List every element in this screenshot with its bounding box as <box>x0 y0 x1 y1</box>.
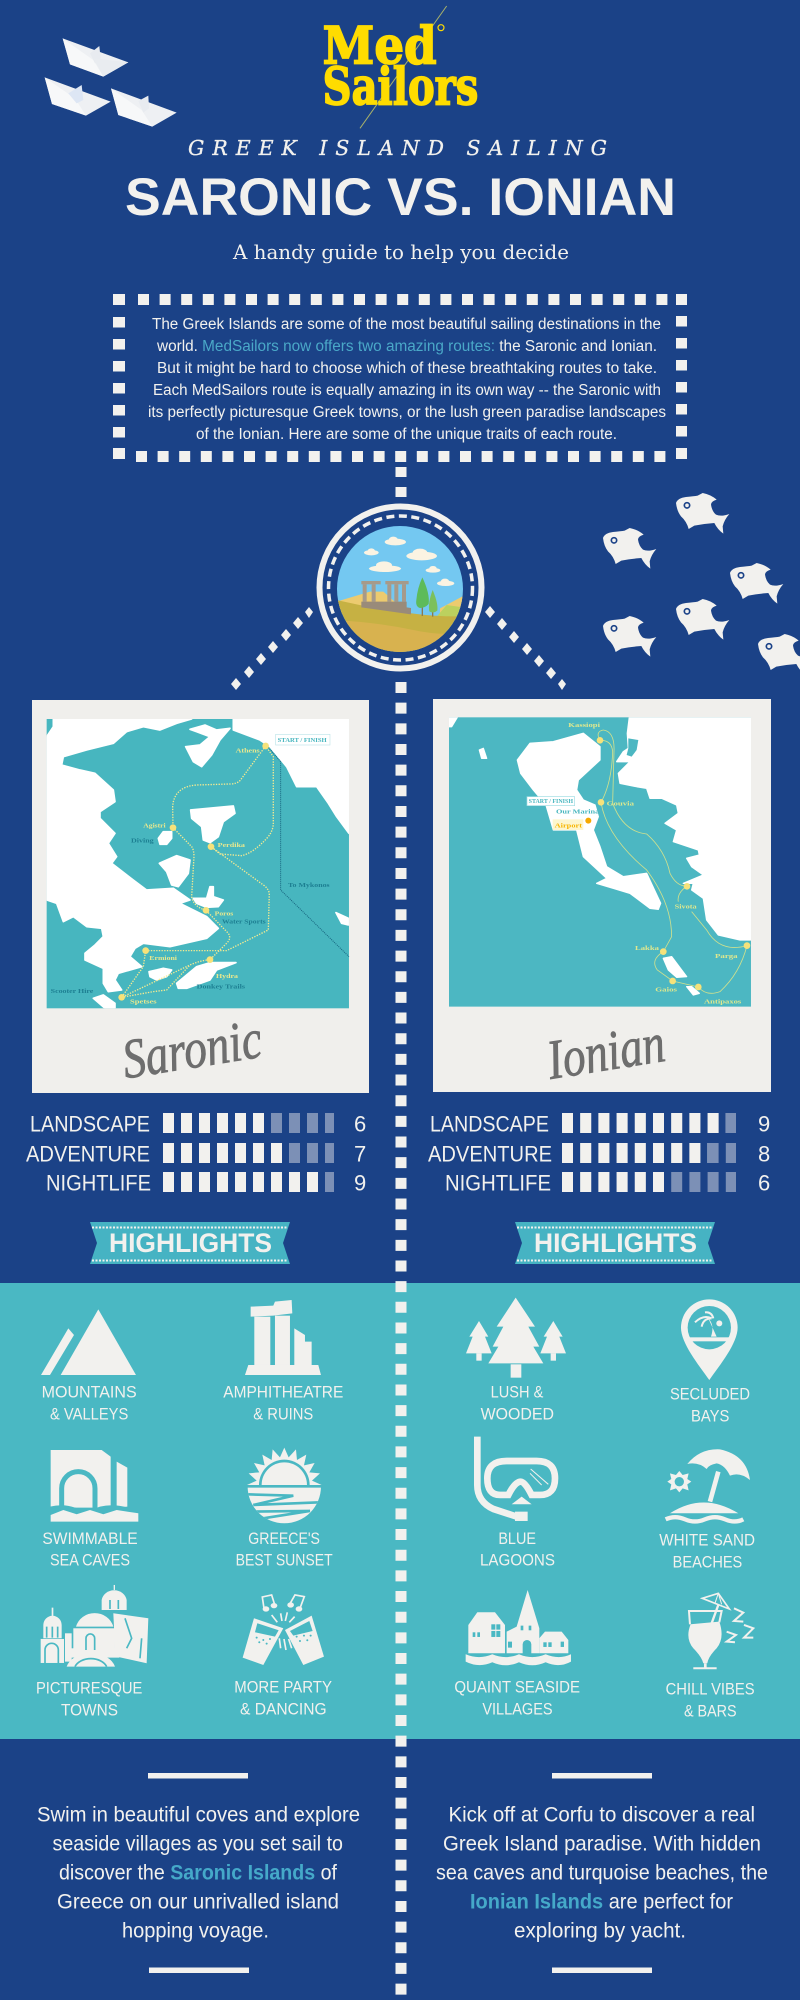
stats: Saronic: 6 <box>354 1112 366 1136</box>
map: Saronic route: Athens <box>236 748 260 755</box>
ribbon: highlights right: HIGHLIGHTS <box>534 1228 697 1258</box>
stats: Ionian: ADVENTURE <box>428 1142 552 1166</box>
labels: Saronic highlights: MORE PARTY <box>234 1677 332 1696</box>
labels: Ionian highlights: LAGOONS <box>480 1551 555 1570</box>
stats: Saronic: ADVENTURE <box>26 1142 150 1166</box>
stats: Saronic: LANDSCAPE <box>30 1112 150 1136</box>
stats: Saronic: NIGHTLIFE <box>46 1170 151 1196</box>
map: Saronic route: Donkey Trails <box>197 984 245 991</box>
closing text: Ionian: Ionian Islands are perfect for <box>470 1890 733 1914</box>
stats: Ionian: 6 <box>758 1170 770 1196</box>
icon: seaside village <box>466 1590 571 1665</box>
labels: Ionian highlights: WHITE SAND <box>659 1531 755 1550</box>
closing text: Saronic: hopping voyage. <box>122 1918 269 1942</box>
intro text <box>148 316 666 443</box>
labels: Saronic highlights: BEST SUNSET <box>236 1551 333 1570</box>
intro text: world. MedSailors now offers two amazing routes: the Saronic and Ionian. <box>156 338 657 355</box>
logo: MedSailors: Sailors <box>323 56 478 117</box>
icon: party glasses <box>243 1595 324 1665</box>
central dotted spine <box>396 467 406 1995</box>
logo: MedSailors <box>323 6 478 128</box>
map: Ionian route: Sivota <box>675 903 697 910</box>
map: Ionian route: Antipaxos <box>704 998 742 1005</box>
labels: Ionian highlights: CHILL VIBES <box>666 1679 755 1698</box>
icon: sea cave <box>50 1450 138 1522</box>
map: Ionian route: Gouvia <box>607 800 635 807</box>
map: Ionian route: Our Marina <box>556 809 600 816</box>
map: Ionian route: Airport <box>555 822 583 829</box>
map: Ionian route: Parga <box>715 953 739 960</box>
map: Ionian route: Gaios <box>655 987 678 994</box>
school of fish <box>603 493 800 675</box>
icon: location pin with palm <box>681 1299 738 1380</box>
labels: Saronic highlights: & DANCING <box>240 1699 327 1718</box>
map: Saronic route: Poros <box>215 911 234 918</box>
labels: Ionian highlights: SECLUDED <box>670 1385 750 1404</box>
map: Saronic route <box>47 719 349 1008</box>
labels: Saronic highlights: SEA CAVES <box>50 1551 130 1570</box>
labels: Saronic highlights: & RUINS <box>253 1404 313 1423</box>
icon: paper boats <box>45 38 177 127</box>
stats: Ionian <box>428 1112 770 1196</box>
map: Saronic route: Ermioni <box>149 955 177 962</box>
labels: Ionian highlights: VILLAGES <box>482 1699 553 1718</box>
labels: Ionian highlights: BLUE <box>498 1529 536 1548</box>
dotted frame around intro <box>113 294 687 459</box>
closing text: Ionian: exploring by yacht. <box>514 1918 686 1942</box>
map: Saronic route: Agistri <box>143 822 166 829</box>
map: Saronic route: Scooter Hire <box>51 988 93 995</box>
stats: Saronic: 7 <box>354 1142 366 1166</box>
icon: beach umbrella <box>666 1449 750 1521</box>
map: Saronic route: Diving <box>131 837 154 844</box>
labels: Ionian highlights <box>454 1383 755 1720</box>
ribbon: highlights left: HIGHLIGHTS <box>109 1228 272 1258</box>
icon: snorkel mask <box>477 1437 555 1521</box>
icon: trees <box>466 1298 566 1378</box>
intro text: Each MedSailors route is equally amazing in its own way -- the Saronic with <box>153 382 661 399</box>
labels: Saronic highlights: TOWNS <box>61 1700 118 1719</box>
ribbon: highlights right <box>515 1222 715 1264</box>
stats: Saronic: 9 <box>354 1170 366 1196</box>
ribbon: highlights left <box>90 1222 290 1264</box>
highlights: Ionian icons and labels <box>454 1298 755 1720</box>
map: Saronic route: Spetses <box>130 999 157 1006</box>
closing text: Ionian: sea caves and turquoise beaches, the <box>436 1860 768 1884</box>
map: Ionian route: START / FINISH <box>529 798 574 805</box>
labels: Saronic highlights: GREECE'S <box>248 1529 320 1548</box>
map: Saronic route: To Mykonos <box>288 882 330 889</box>
map: Saronic route: START / FINISH <box>278 737 327 744</box>
closing text: Ionian: Greek Island paradise. With hidden <box>443 1832 761 1856</box>
icon: ruins <box>245 1300 321 1375</box>
labels: Saronic highlights: AMPHITHEATRE <box>223 1383 343 1402</box>
closing text: Saronic: seaside villages as you set sail to <box>52 1832 343 1856</box>
diamond connector left <box>231 607 313 690</box>
stats: Ionian: LANDSCAPE <box>430 1112 549 1136</box>
panel: Saronic polaroid <box>32 700 369 1093</box>
teal highlights band <box>0 1283 800 1739</box>
panel: Ionian polaroid <box>433 699 771 1092</box>
intro text: its perfectly picturesque Greek towns, or the lush green paradise landscapes <box>148 404 666 421</box>
labels: Saronic highlights: & VALLEYS <box>50 1404 128 1423</box>
diamond connector right <box>485 606 566 690</box>
script caption: Ionian: Ionian <box>542 1012 669 1092</box>
intro text: But it might be hard to choose which of these breathtaking routes to take. <box>157 360 657 377</box>
title: SARONIC VS. IONIAN <box>125 168 676 227</box>
map: Saronic route: Hydra <box>216 973 239 980</box>
map: Saronic route: Water Sports <box>222 919 266 926</box>
labels: Ionian highlights: BEACHES <box>673 1552 742 1571</box>
icon: cocktail <box>688 1593 753 1668</box>
stats: Ionian: 9 <box>758 1112 770 1136</box>
script caption: Saronic: Saronic <box>118 1008 266 1091</box>
icon: sunset <box>247 1448 322 1524</box>
icon: mountains <box>41 1309 136 1375</box>
closing text: Ionian: Kick off at Corfu to discover a real <box>448 1802 755 1826</box>
labels: Ionian highlights: LUSH & <box>491 1383 543 1402</box>
stats: Saronic <box>26 1112 366 1196</box>
closing text: Saronic: discover the Saronic Islands of <box>59 1860 337 1884</box>
labels: Saronic highlights <box>36 1383 343 1719</box>
closing text: Saronic: Greece on our unrivalled island <box>57 1890 339 1914</box>
map: Ionian route <box>449 717 751 1007</box>
labels: Saronic highlights: PICTURESQUE <box>36 1679 142 1698</box>
subtitle: A handy guide to help you decide <box>232 240 569 264</box>
labels: Ionian highlights: WOODED <box>481 1404 554 1423</box>
labels: Saronic highlights: MOUNTAINS <box>42 1383 137 1402</box>
closing text: Saronic: Swim in beautiful coves and explore <box>37 1802 360 1826</box>
map: Ionian route: Lakka <box>635 945 660 952</box>
intro text: The Greek Islands are some of the most beautiful sailing destinations in the <box>152 316 661 333</box>
logo: MedSailors: Med <box>323 15 437 76</box>
round landscape emblem <box>320 506 482 668</box>
labels: Ionian highlights: & BARS <box>684 1701 737 1720</box>
map: Saronic route: Perdika <box>218 842 246 849</box>
kicker: Greek Island Sailing: GREEK ISLAND SAILING <box>188 136 607 160</box>
labels: Ionian highlights: QUAINT SEASIDE <box>454 1677 580 1696</box>
intro text: of the Ionian. Here are some of the unique traits of each route. <box>196 426 617 443</box>
highlights: Saronic icons and labels <box>36 1300 343 1719</box>
labels: Ionian highlights: BAYS <box>691 1406 729 1425</box>
stats: Ionian: 8 <box>758 1142 770 1166</box>
icon: picturesque town <box>41 1585 148 1667</box>
closing text: Saronic <box>37 1773 360 1973</box>
stats: Ionian: NIGHTLIFE <box>445 1170 551 1196</box>
map: Ionian route: Kassiopi <box>568 722 600 729</box>
labels: Saronic highlights: SWIMMABLE <box>42 1529 138 1548</box>
closing text: Ionian <box>436 1773 768 1973</box>
